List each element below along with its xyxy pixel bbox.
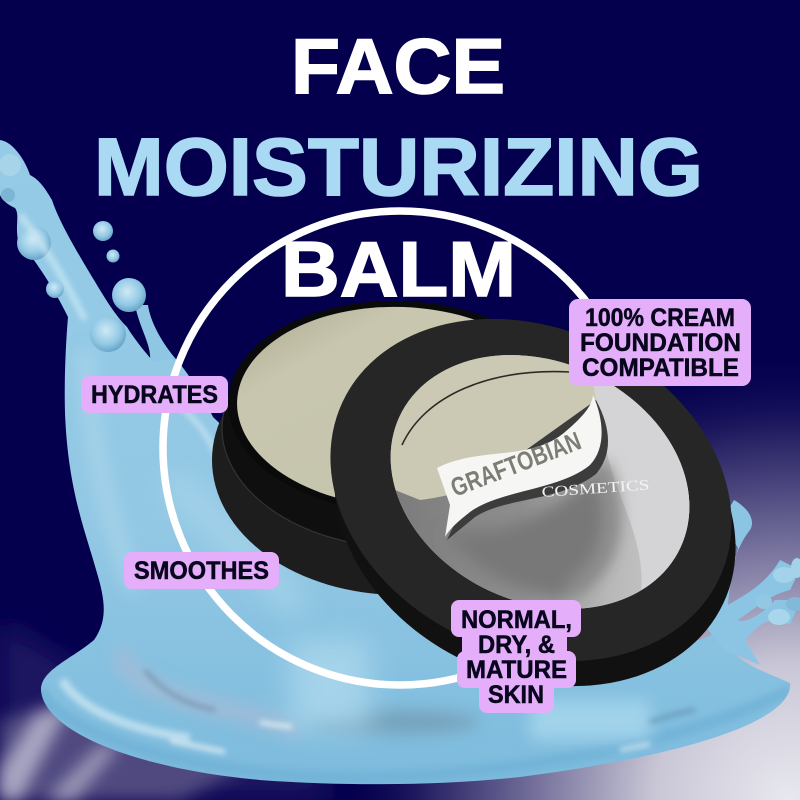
jar base (212, 325, 588, 595)
splash right branches (700, 500, 800, 665)
droplets (0, 154, 175, 362)
ribbon (437, 395, 602, 537)
label: skin types: NORMAL, (461, 606, 572, 634)
lid window (349, 308, 731, 656)
title line: FACE: FACE (291, 22, 505, 110)
product: lid (330, 318, 736, 686)
brand subline: COSMETICS (541, 477, 650, 501)
label: smoothes: SMOOTHES (134, 557, 269, 585)
splash main body (0, 140, 790, 784)
jar thread (218, 310, 582, 554)
label: foundation compatible: 100% CREAM (585, 304, 735, 332)
lid side (278, 280, 792, 750)
ribbon shadow (447, 400, 608, 540)
label: skin types: SKIN (488, 681, 544, 709)
product: open balm jar (212, 295, 588, 595)
label: skin types (451, 600, 581, 713)
label: foundation compatible: COMPATIBLE (582, 354, 739, 382)
label: hydrates (81, 376, 228, 413)
label: skin types: MATURE (466, 656, 567, 684)
lid face (274, 255, 788, 725)
splash highlights (20, 215, 790, 778)
brand name: GRAFTOBIAN (446, 425, 585, 503)
white ring (163, 211, 637, 685)
title line: MOISTURIZING: MOISTURIZING (94, 122, 703, 213)
label: skin types: DRY, & (478, 631, 555, 659)
jar rim (224, 295, 576, 519)
window contents (390, 355, 690, 608)
label: hydrates: HYDRATES (91, 381, 218, 409)
label: smoothes (124, 552, 279, 589)
label: foundation compatible (569, 299, 751, 386)
title (94, 22, 703, 313)
title line: BALM: BALM (281, 225, 516, 313)
label: foundation compatible: FOUNDATION (580, 329, 741, 357)
balm surface (234, 301, 566, 513)
